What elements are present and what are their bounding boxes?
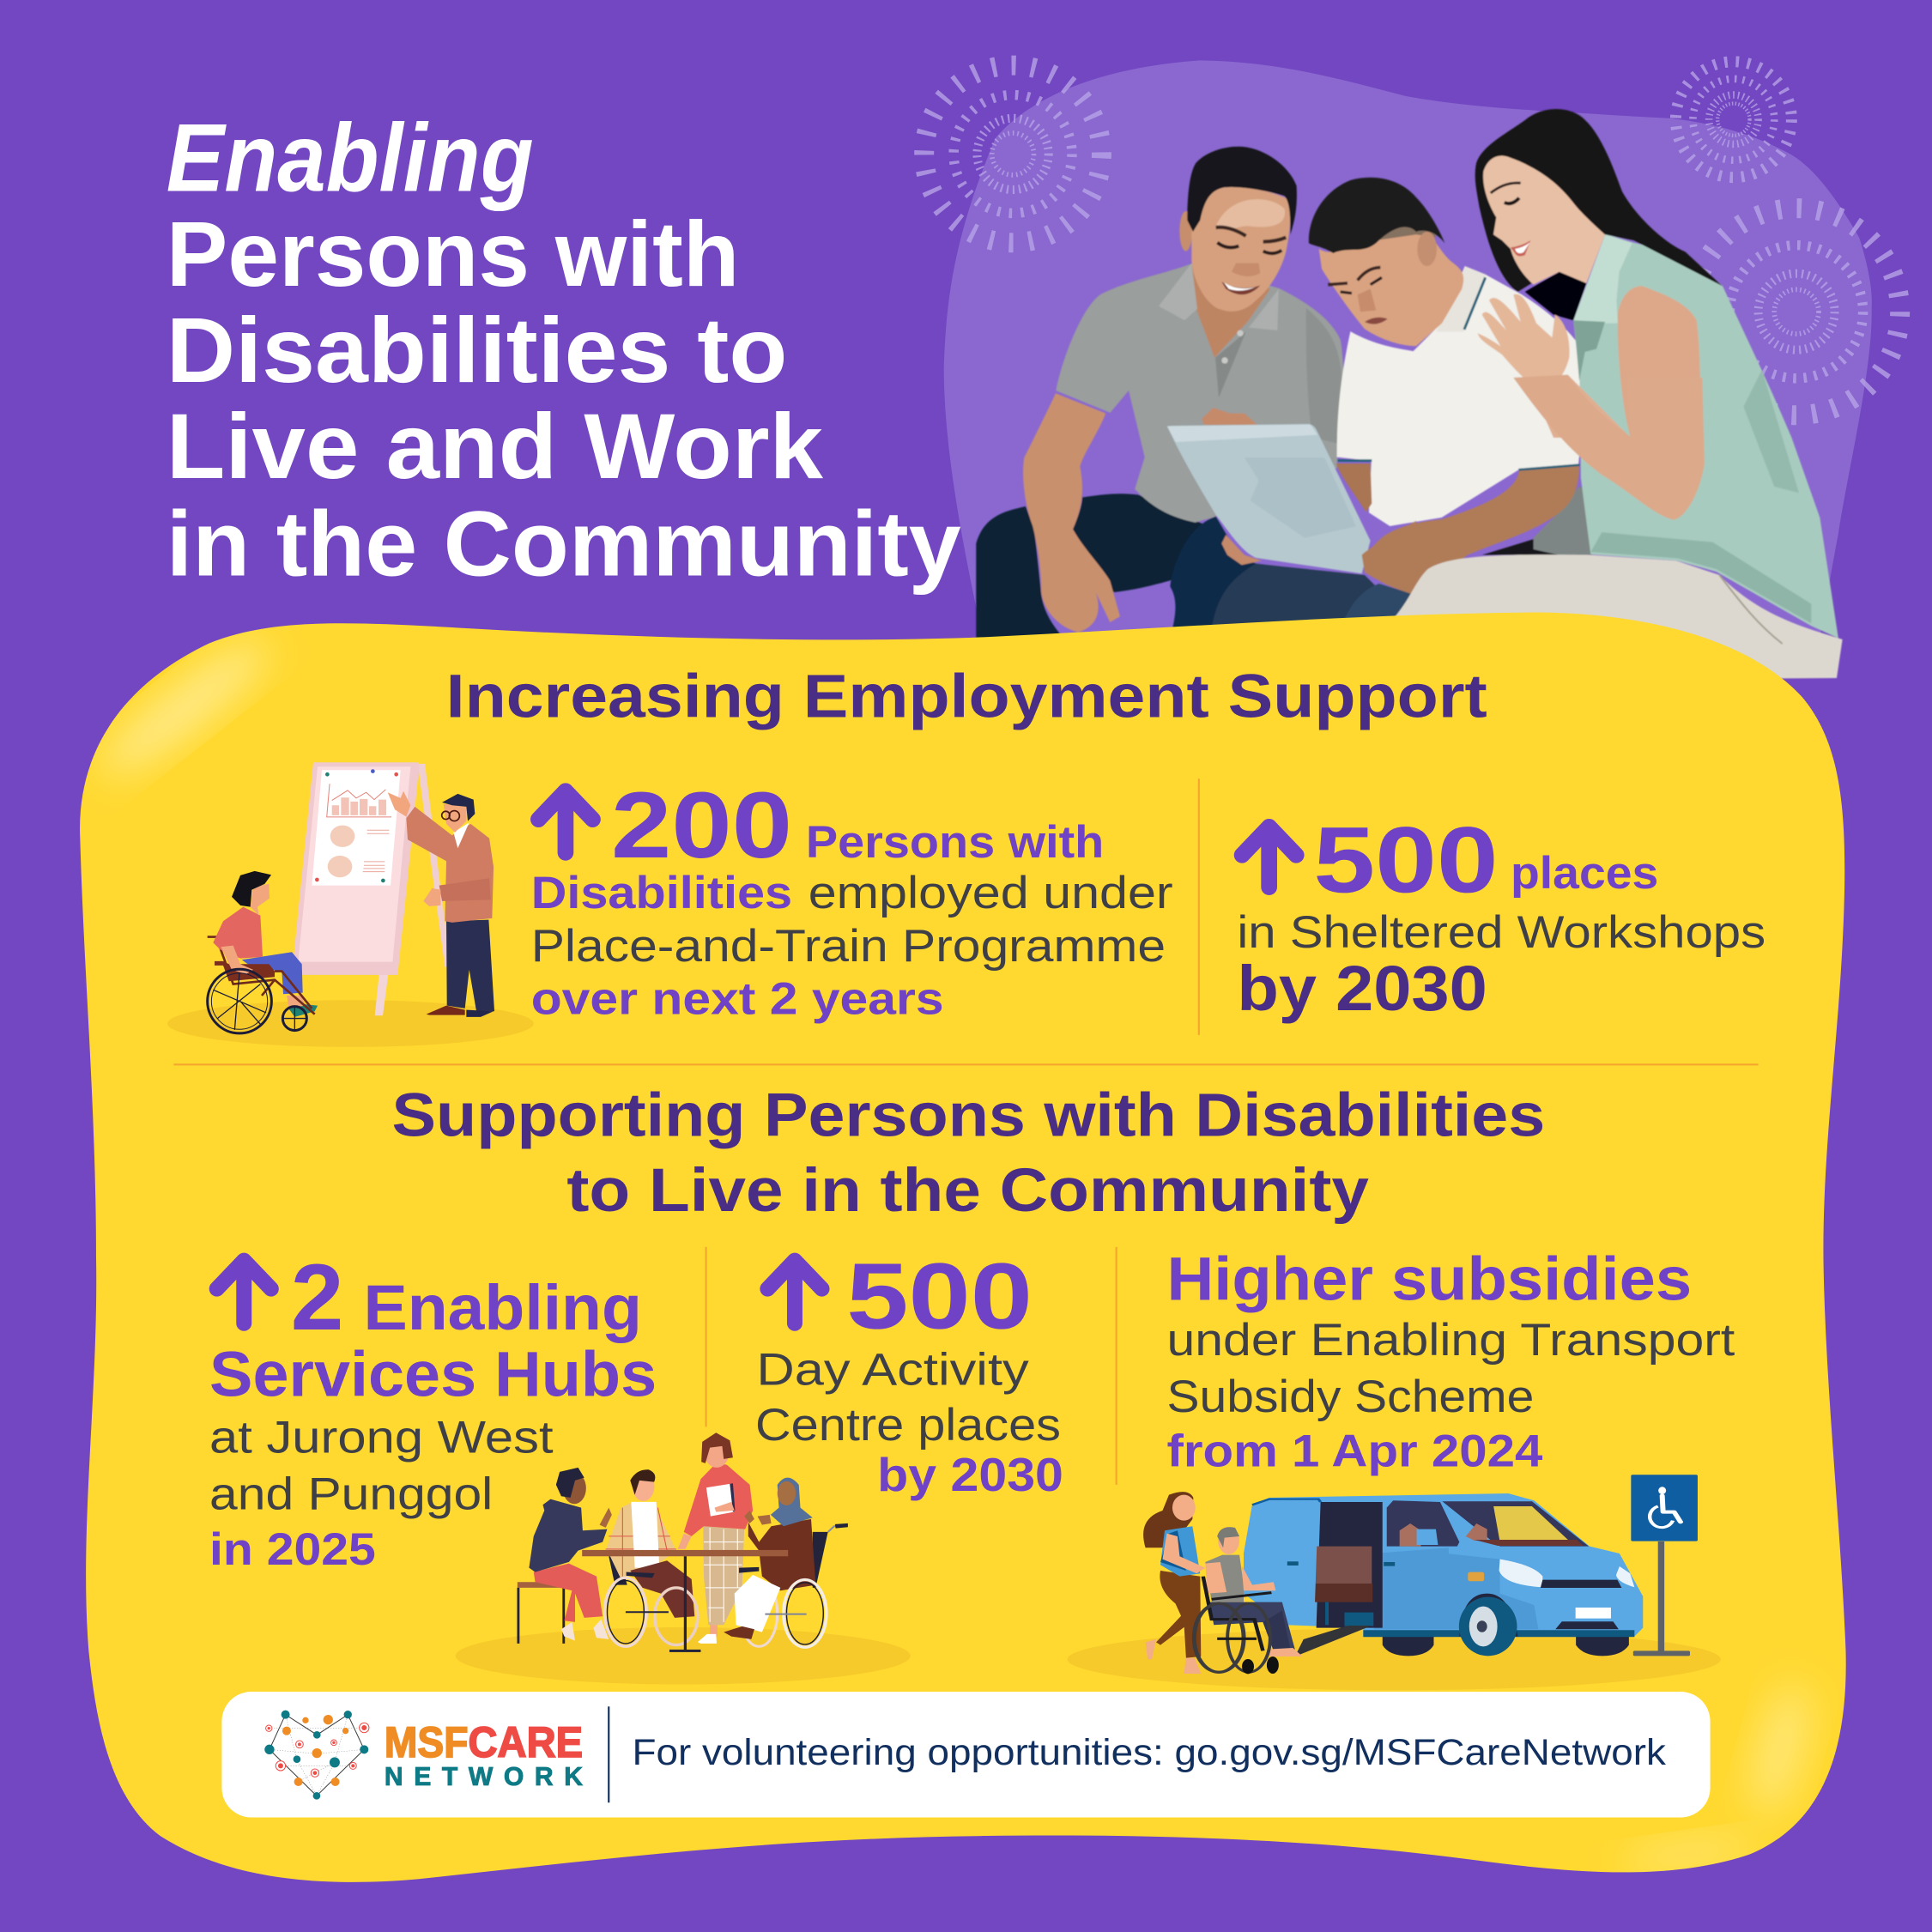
man in wheelchair bbox=[1194, 1527, 1303, 1674]
woman's forearm and elbow bbox=[1513, 375, 1705, 520]
text: at Jurong West: at Jurong West bbox=[209, 1413, 554, 1463]
illustration: presenter and wheelchair user bbox=[167, 762, 534, 1047]
text: Enabling: Enabling bbox=[363, 1271, 642, 1343]
title line: Persons with: Persons with bbox=[167, 203, 739, 306]
middle man's shirt bbox=[1337, 266, 1584, 526]
text: Centre places: Centre places bbox=[755, 1400, 1061, 1451]
section heading: Increasing Employment Support: Increasing Employment Support bbox=[446, 663, 1487, 731]
illustration: group at table bbox=[456, 1432, 911, 1685]
text: by 2030: by 2030 bbox=[877, 1449, 1063, 1501]
stat: 500 sheltered workshop places bbox=[1237, 808, 1765, 1024]
text: employed under: employed under bbox=[809, 868, 1173, 918]
flip chart bbox=[292, 762, 451, 1015]
background blob: light purple bbox=[944, 60, 1872, 653]
text: by 2030: by 2030 bbox=[1237, 952, 1487, 1024]
text: Place-and-Train Programme: Place-and-Train Programme bbox=[531, 921, 1166, 972]
section heading: Supporting Persons with Disabilities to Live in the Community: to Live in the Community bbox=[566, 1156, 1369, 1225]
person with hoodie on stool bbox=[518, 1468, 612, 1644]
left man's polo bbox=[1056, 263, 1343, 523]
ground shadow bbox=[167, 1000, 534, 1047]
stat: 200 persons employed bbox=[531, 773, 1173, 1024]
text: from 1 Apr 2024: from 1 Apr 2024 bbox=[1167, 1426, 1543, 1476]
number 500: 500 bbox=[1313, 808, 1499, 912]
text: volunteering link: For volunteering opportunities: go.gov.sg/MSFCareNetwork bbox=[632, 1732, 1666, 1773]
title line: Enabling: Enabling bbox=[167, 105, 534, 212]
wheelchair user with checked cardigan bbox=[605, 1469, 698, 1646]
firework top right bbox=[1675, 62, 1791, 178]
stat: higher subsidies bbox=[1167, 1245, 1735, 1476]
gap shadow and right forearm bbox=[1373, 465, 1843, 681]
number 500: 500 bbox=[846, 1245, 1033, 1349]
standing person bbox=[678, 1432, 753, 1644]
text: in Sheltered Workshops: in Sheltered Workshops bbox=[1237, 907, 1765, 958]
illustration: accessible van with wheelchair user bbox=[1068, 1475, 1721, 1690]
left man's head bbox=[1159, 147, 1297, 397]
text: Disabilities: Disabilities bbox=[531, 868, 792, 918]
icon: up arrow bbox=[767, 1261, 822, 1323]
woman's blouse bbox=[1573, 234, 1838, 639]
section heading: Supporting Persons with Disabilities to Live in the Community bbox=[392, 1081, 1545, 1225]
title bbox=[167, 105, 961, 595]
divider bbox=[608, 1706, 609, 1802]
middle man's head bbox=[1309, 178, 1487, 346]
title line: in the Community: in the Community bbox=[167, 492, 961, 595]
call to action bar bbox=[221, 1692, 1711, 1817]
man presenting bbox=[388, 791, 494, 1017]
number 200: 200 bbox=[611, 773, 792, 878]
woman's hair, head and arm bbox=[1475, 109, 1723, 438]
firework left bbox=[924, 65, 1101, 243]
woman in wheelchair bbox=[208, 871, 318, 1033]
title line: Live and Work: Live and Work bbox=[167, 395, 823, 498]
logo: MSF Care Network heart bbox=[264, 1711, 369, 1800]
text: Day Activity: Day Activity bbox=[756, 1345, 1029, 1396]
caregiver bbox=[1143, 1492, 1205, 1674]
firework right bbox=[1693, 209, 1900, 415]
icon: up arrow bbox=[538, 791, 593, 852]
section heading: Supporting Persons with Disabilities to Live in the Community: Supporting Persons with Disabilities bbox=[392, 1081, 1545, 1150]
title line: Disabilities to: Disabilities to bbox=[167, 299, 787, 402]
text: in 2025: in 2025 bbox=[209, 1524, 376, 1575]
text: under Enabling Transport: under Enabling Transport bbox=[1167, 1315, 1735, 1366]
icon: up arrow bbox=[1242, 827, 1296, 887]
ground shadow bbox=[1068, 1628, 1721, 1690]
logo text: MSF: MSF bbox=[385, 1718, 469, 1766]
legs and left man's arm bbox=[976, 393, 1416, 644]
icon: up arrow bbox=[217, 1261, 271, 1323]
logo text: NETWORK: NETWORK bbox=[385, 1763, 583, 1791]
van bbox=[1244, 1493, 1643, 1656]
table bbox=[582, 1550, 788, 1652]
photo: three people looking at a laptop bbox=[976, 109, 1843, 681]
number 2: 2 bbox=[291, 1245, 344, 1350]
woman's trousers bbox=[1389, 554, 1843, 681]
text: and Punggol: and Punggol bbox=[209, 1469, 493, 1520]
ground shadow bbox=[456, 1627, 911, 1685]
main yellow panel bbox=[80, 612, 1846, 1882]
stat: 2 enabling services hubs bbox=[209, 1245, 657, 1575]
text: Higher subsidies: Higher subsidies bbox=[1167, 1245, 1692, 1314]
text: Services Hubs: Services Hubs bbox=[209, 1338, 657, 1410]
stat: 500 day activity centre places bbox=[755, 1245, 1063, 1501]
laptop bbox=[1167, 424, 1371, 573]
text: over next 2 years: over next 2 years bbox=[531, 973, 944, 1024]
text: Subsidy Scheme: Subsidy Scheme bbox=[1167, 1372, 1534, 1422]
text: places: places bbox=[1511, 848, 1658, 899]
text: Persons with: Persons with bbox=[806, 817, 1104, 868]
sign: accessible parking bbox=[1631, 1475, 1698, 1656]
fireworks decoration bbox=[924, 62, 1900, 415]
hands by laptop bbox=[1202, 408, 1257, 425]
wheelchair user with hijab bbox=[724, 1478, 848, 1647]
middle man's left forearm bbox=[1167, 408, 1416, 595]
logo text: CARE: CARE bbox=[469, 1718, 583, 1766]
